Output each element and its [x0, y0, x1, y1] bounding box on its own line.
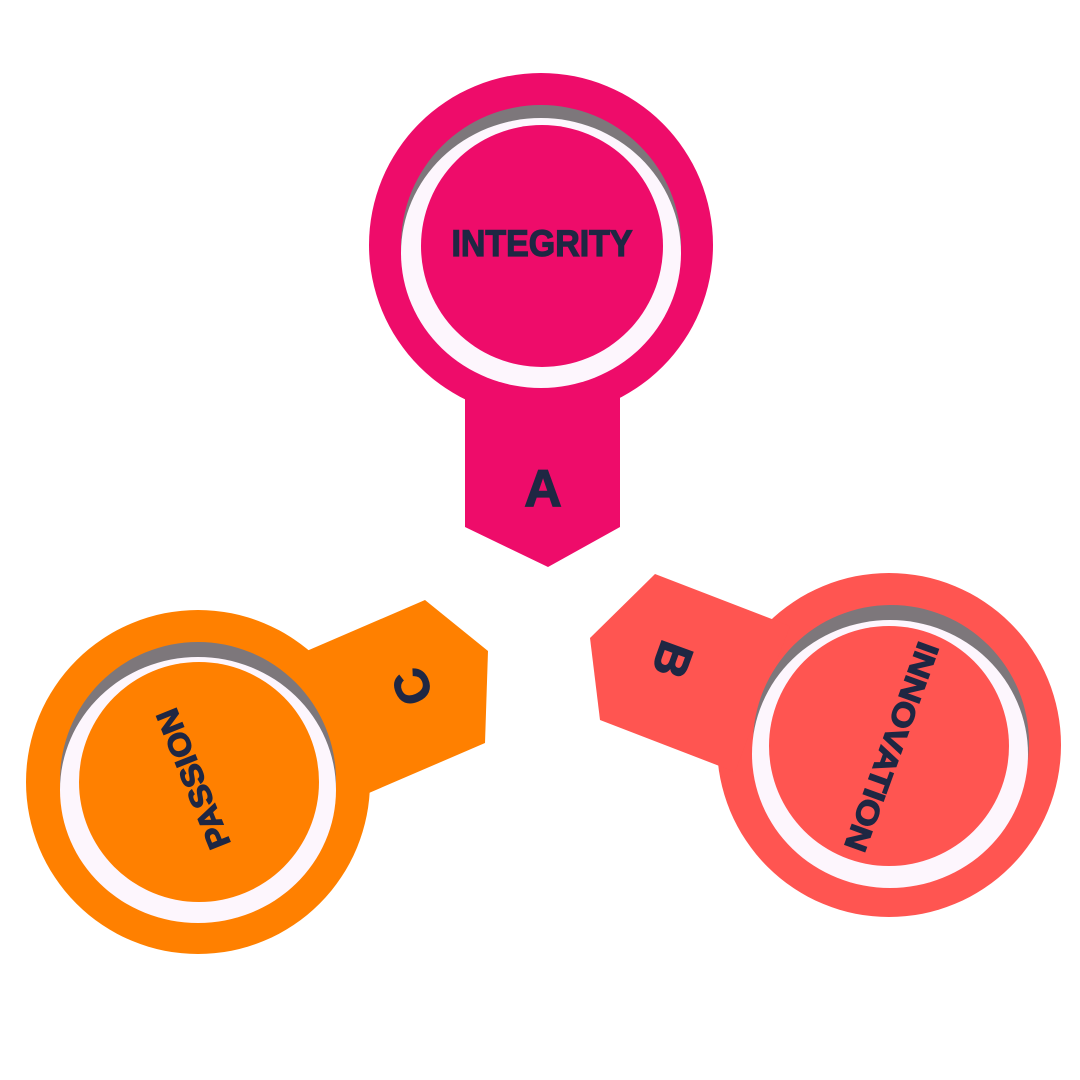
letter A: A [524, 460, 562, 518]
label: PASSION: PASSION [150, 704, 237, 854]
pin C body [26, 600, 488, 954]
pin B inner ring [752, 605, 1029, 888]
pin C inner ring [60, 642, 336, 923]
letter B: B [641, 634, 702, 685]
pin A body [369, 73, 713, 567]
pin B: innovation [590, 573, 1061, 917]
pin C: passion [26, 600, 488, 954]
pin A: integrity [369, 73, 713, 567]
letter C: C [382, 660, 445, 713]
pin A inner ring [401, 105, 681, 388]
label: INTEGRITY: INTEGRITY [452, 223, 633, 264]
label: INNOVATION: INNOVATION [837, 637, 946, 856]
pin B body [590, 573, 1061, 917]
